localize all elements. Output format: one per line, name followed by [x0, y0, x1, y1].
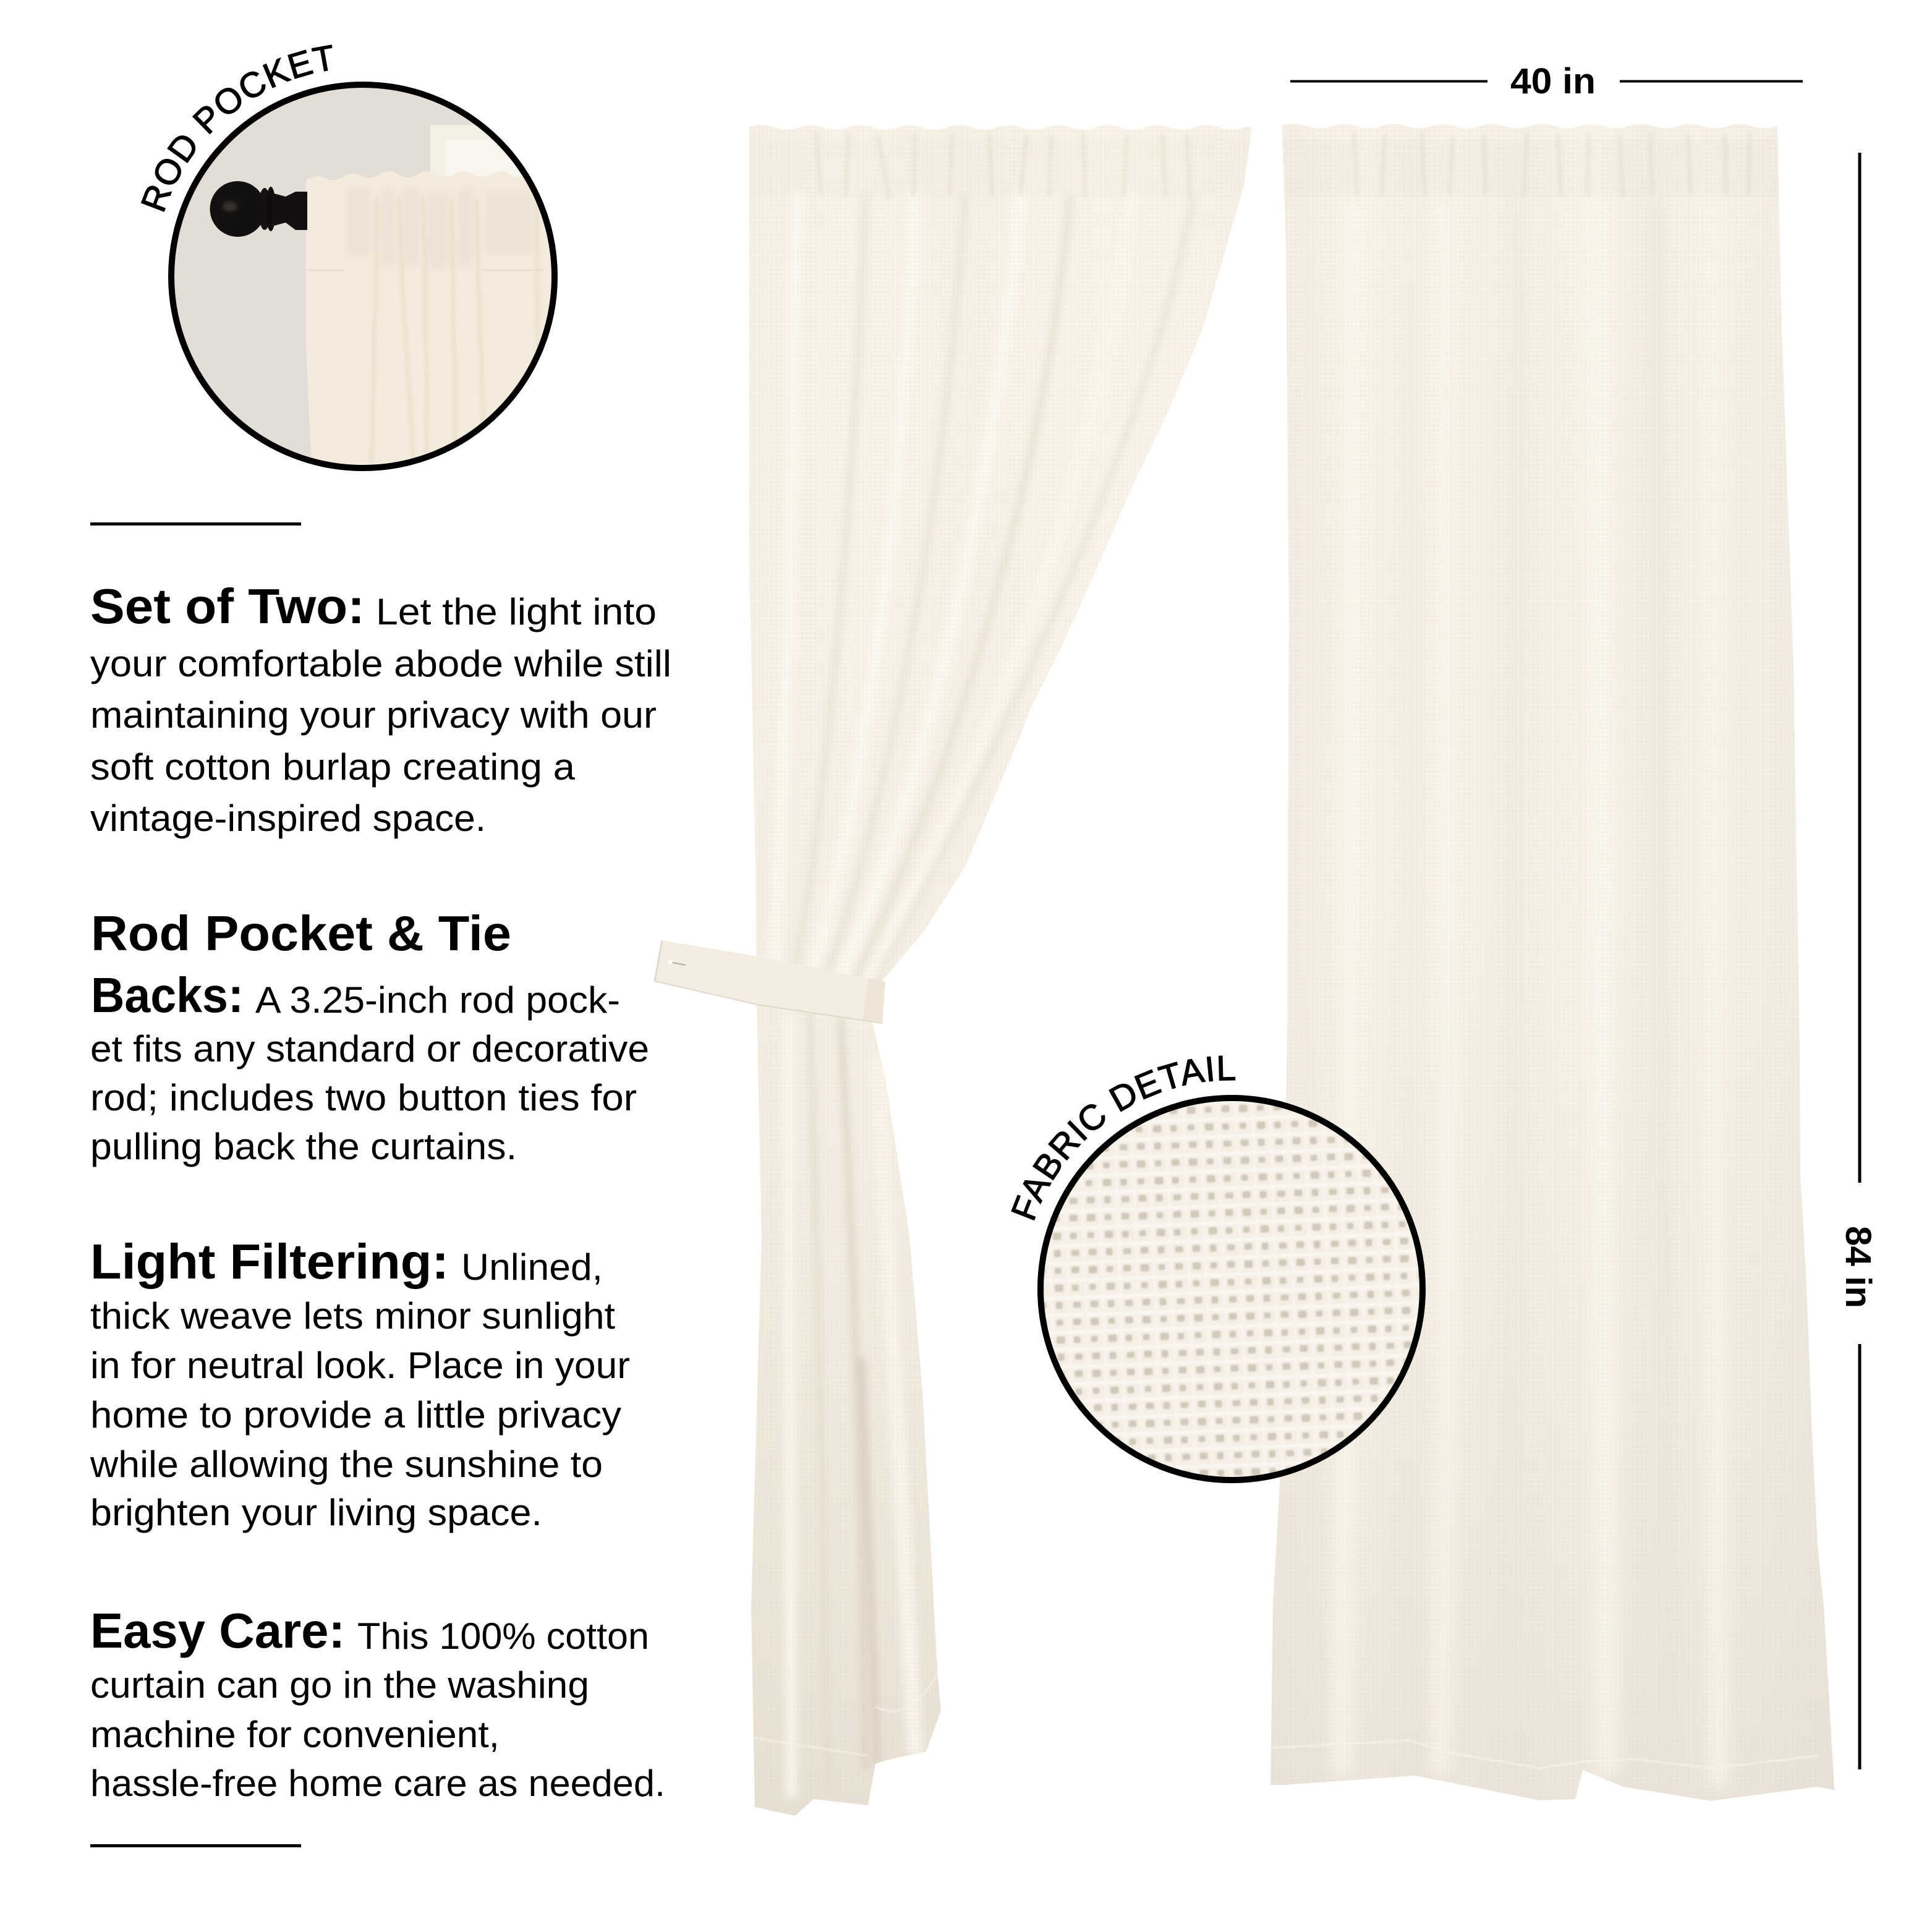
- text block: set of two: [90, 579, 671, 839]
- text block: light filtering: thick weave lets minor sunlight: [90, 1295, 615, 1337]
- label: rod pocket: ROD POCKET: [141, 45, 333, 212]
- width dimension: 40 in: 40 in: [1510, 61, 1596, 101]
- text block: easy care: curtain can go in the washing: [90, 1664, 589, 1706]
- text block: set of two: soft cotton burlap creating a: [90, 746, 576, 788]
- top divider: [90, 522, 301, 526]
- text block: set of two: your comfortable abode while still: [90, 643, 671, 684]
- text block: light filtering: in for neutral look. Place in your: [90, 1345, 630, 1386]
- text block: easy care: Easy Care:: [90, 1603, 345, 1658]
- text block: rod pocket and tie backs: pulling back the curtains.: [90, 1126, 517, 1167]
- text block: rod pocket and tie backs: [90, 906, 649, 1167]
- text block: light filtering: [90, 1234, 630, 1533]
- text block: light filtering: Unlined,: [461, 1246, 603, 1288]
- tie back strap with button: [655, 940, 885, 1023]
- height dimension: 84 in: 84 in: [1838, 1226, 1878, 1308]
- text block: set of two: vintage-inspired space.: [90, 798, 486, 839]
- text block: set of two: Set of Two:: [90, 579, 365, 634]
- label: fabric detail: FABRIC DETAIL: [1011, 1055, 1235, 1220]
- text block: rod pocket and tie backs: A 3.25-inch rod pock-: [255, 979, 620, 1021]
- curtain: left panel tied back: [742, 117, 1261, 1824]
- inset circle: fabric detail: [1040, 1098, 1423, 1480]
- text block: easy care: This 100% cotton: [357, 1615, 649, 1657]
- text block: rod pocket and tie backs: et fits any standard or decorative: [90, 1028, 649, 1070]
- text block: rod pocket and tie backs: Rod Pocket & Tie: [91, 906, 511, 961]
- inset circle: rod pocket photo: [171, 85, 566, 482]
- text block: set of two: Let the light into: [376, 591, 657, 632]
- text block: light filtering: home to provide a little privacy: [90, 1394, 621, 1436]
- text block: light filtering: Light Filtering:: [90, 1234, 449, 1289]
- text block: rod pocket and tie backs: Backs:: [91, 968, 244, 1023]
- text block: light filtering: brighten your living space.: [90, 1492, 542, 1533]
- text block: easy care: machine for convenient,: [90, 1714, 500, 1755]
- curtain: right panel full length: [1267, 117, 1842, 1811]
- text block: easy care: [90, 1603, 665, 1804]
- text block: rod pocket and tie backs: rod; includes two button ties for: [90, 1077, 637, 1118]
- text block: set of two: maintaining your privacy with our: [90, 694, 657, 736]
- text block: easy care: hassle-free home care as needed.: [90, 1763, 665, 1804]
- text block: light filtering: while allowing the sunshine to: [90, 1444, 603, 1485]
- bottom divider: [90, 1844, 301, 1847]
